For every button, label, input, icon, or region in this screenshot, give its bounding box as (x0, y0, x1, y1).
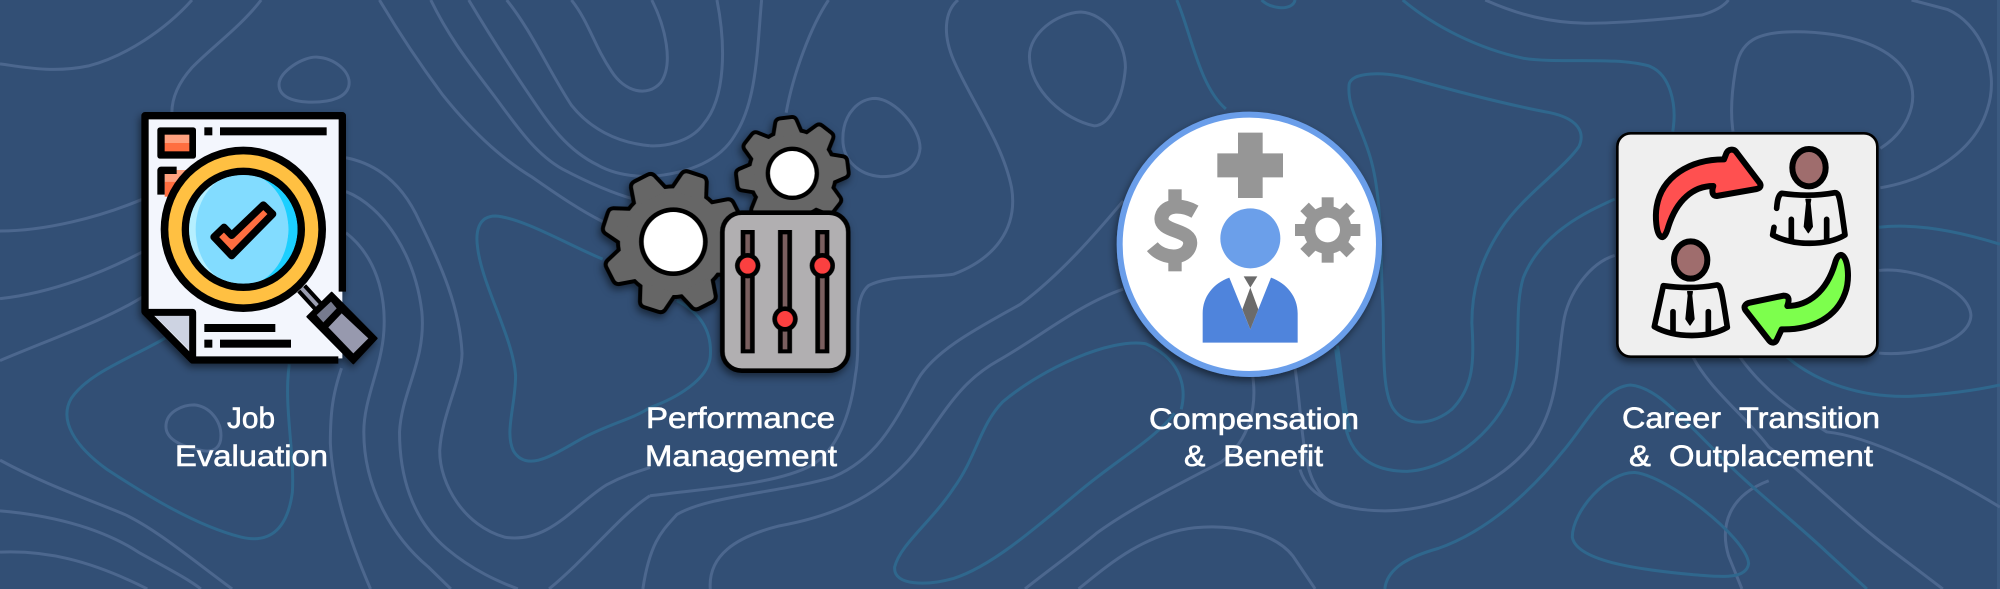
icon: career transition swap (1617, 133, 1877, 357)
label: Job Evaluation: Job (227, 402, 275, 435)
label: Performance Management: Management (645, 440, 838, 473)
icon: gears and sliders (586, 113, 853, 371)
label: Job Evaluation (175, 402, 328, 473)
label: Compensation and Benefit: & Benefit (1184, 440, 1324, 473)
label: Performance Management (645, 402, 838, 473)
label: Compensation and Benefit (1149, 403, 1359, 473)
label: Career Transition and Outplacement (1622, 402, 1880, 473)
icon: compensation and benefit badge (1120, 115, 1379, 374)
label: Performance Management: Performance (646, 402, 835, 435)
label: Career Transition and Outplacement: & Outplacement (1629, 440, 1874, 473)
label: Job Evaluation: Evaluation (175, 440, 328, 473)
label: Compensation and Benefit: Compensation (1149, 403, 1359, 436)
icon: job evaluation document with magnifier (145, 116, 377, 363)
label: Career Transition and Outplacement: Career Transition (1622, 402, 1880, 435)
